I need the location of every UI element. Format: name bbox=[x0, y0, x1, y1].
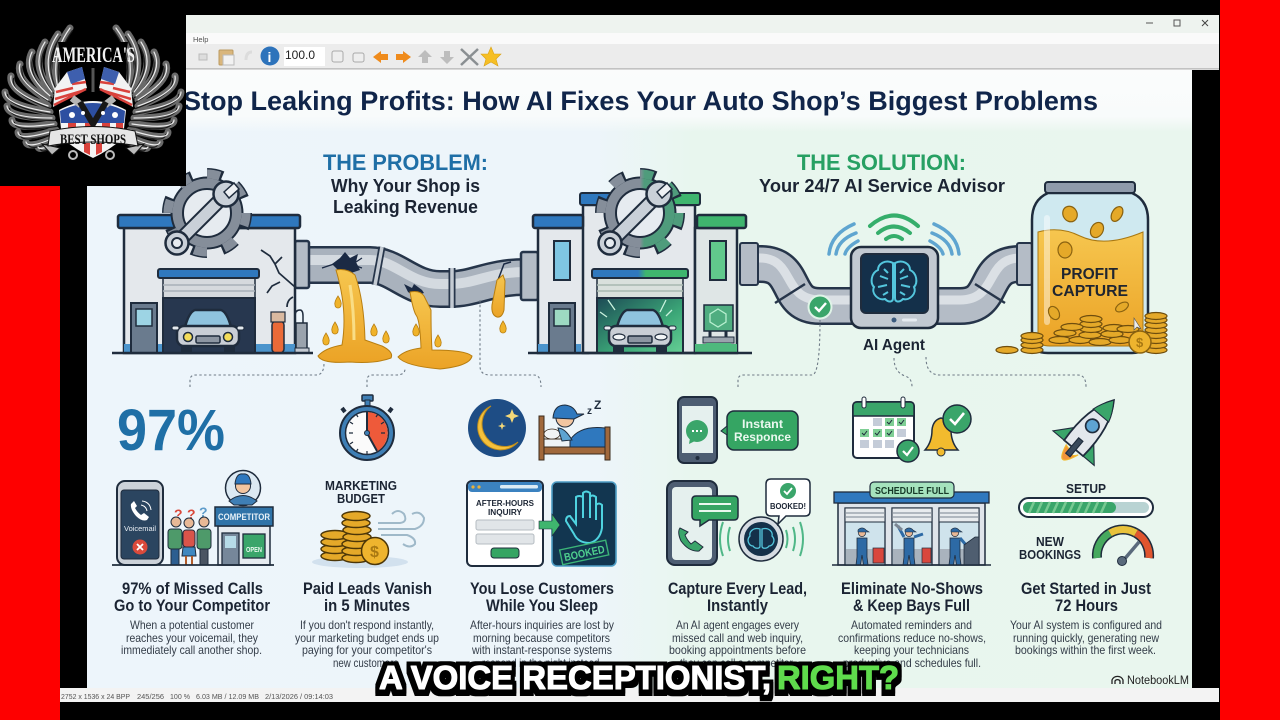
side letterbox bars bbox=[60, 70, 1219, 688]
heading: the problem: THE PROBLEM: bbox=[323, 150, 488, 175]
text: get started: Your AI system is configured and bbox=[1010, 618, 1162, 632]
icon: rocket bbox=[1043, 383, 1135, 477]
leak two bbox=[398, 284, 472, 369]
text: lose customers: respond in the night instead. bbox=[482, 656, 602, 670]
icon: phone with instant response: Instant bbox=[742, 417, 783, 431]
text: eliminate no-shows: productive and schedules full. bbox=[843, 656, 981, 670]
bays bbox=[845, 508, 979, 565]
heading: the solution bbox=[759, 150, 1005, 196]
coin stacks: $ bbox=[1136, 335, 1144, 350]
illustration: setup and new bookings bbox=[1019, 482, 1153, 566]
dotted connectors bbox=[190, 300, 1086, 387]
text: get started bbox=[1010, 580, 1162, 657]
text: PROFIT CAPTURE bbox=[1052, 266, 1128, 300]
sign: schedule full: SCHEDULE FULL bbox=[875, 485, 949, 497]
door bbox=[131, 303, 157, 353]
connected pipes bbox=[740, 243, 1035, 306]
illustration: setup and new bookings: NEW bbox=[1036, 535, 1064, 549]
gear and wrench icon bbox=[166, 174, 246, 254]
AI agent device bbox=[851, 247, 938, 328]
coin stacks: $ bbox=[370, 544, 379, 561]
heading: the problem bbox=[323, 150, 488, 217]
illustration: schedule full shop bbox=[832, 482, 991, 565]
coin stacks bbox=[996, 312, 1167, 354]
AI brain orb bbox=[720, 517, 803, 561]
icon: wireless signal bbox=[829, 216, 959, 254]
banner: best shops bbox=[42, 126, 144, 159]
text: lose customers: While You Sleep bbox=[486, 597, 598, 615]
shield bbox=[59, 98, 126, 158]
text: get started: 72 Hours bbox=[1055, 597, 1118, 615]
status bar: 2/13/2026 / 09:14:03 bbox=[265, 692, 333, 701]
sign: schedule full bbox=[870, 482, 954, 498]
status bar: 2752 x 1536 x 24 BPP bbox=[61, 692, 130, 701]
text: capture lead bbox=[668, 580, 807, 670]
text: paid leads: If you don't respond instantly, bbox=[300, 618, 434, 632]
notebooklm credit: NotebookLM bbox=[1127, 675, 1189, 687]
text: capture lead: they can call a competitor. bbox=[680, 656, 795, 670]
text: paid leads: new customers. bbox=[333, 656, 401, 670]
status bar: 6.03 MB / 12.09 MB bbox=[196, 692, 259, 701]
toolbar bbox=[186, 44, 1219, 70]
illustration: setup and new bookings: SETUP bbox=[1066, 482, 1106, 496]
server device bbox=[703, 305, 734, 353]
progress bar bbox=[1019, 498, 1153, 517]
icon: phone with instant response bbox=[678, 397, 798, 463]
text: eliminate no-shows: Automated reminders and bbox=[851, 618, 972, 632]
garage bbox=[158, 269, 259, 353]
heading: the solution: Your 24/7 AI Service Advisor bbox=[759, 176, 1005, 196]
text: missed calls: 97% of Missed Calls bbox=[122, 580, 263, 598]
icon: stopwatch bbox=[340, 395, 394, 460]
icon: calendar and bell bbox=[853, 397, 971, 462]
problem shop bbox=[112, 174, 313, 353]
coin pile bbox=[1049, 316, 1139, 346]
caption: RIGHT? bbox=[777, 659, 899, 696]
stamp: booked: BOOKED bbox=[563, 544, 606, 564]
text: paid leads: paying for your competitor's bbox=[302, 643, 432, 657]
icon: green check on pipe bbox=[808, 296, 832, 318]
logo text: America's: AMERICA'S bbox=[52, 42, 135, 67]
competitor shop: COMPETITOR bbox=[218, 512, 270, 522]
glowing garage bbox=[592, 269, 688, 353]
caption: A VOICE RECEPTIONIST, bbox=[379, 659, 771, 696]
text: capture lead: booking appointments before bbox=[669, 643, 806, 657]
text: lose customers: After-hours inquiries are lost by bbox=[470, 618, 614, 632]
icon: sleeping person in bed: z bbox=[587, 406, 592, 417]
infographic canvas bbox=[87, 70, 1192, 688]
wall cracks bbox=[261, 250, 295, 307]
illustration: voicemail and competitor bbox=[112, 470, 274, 565]
heading: the problem: Why Your Shop is bbox=[331, 176, 480, 196]
center shop half problem half solution bbox=[528, 174, 752, 353]
text: capture lead: missed call and web inquiry, bbox=[672, 631, 803, 645]
right wing bbox=[114, 28, 181, 151]
competitor shop: OPEN bbox=[246, 547, 262, 554]
label: AI Agent: AI Agent bbox=[863, 337, 926, 354]
title bar bbox=[186, 15, 1219, 44]
text: PROFIT CAPTURE: CAPTURE bbox=[1052, 283, 1128, 300]
illustration: marketing budget bbox=[312, 479, 424, 568]
phone voicemail bbox=[117, 481, 163, 565]
compressor bbox=[295, 310, 309, 353]
icon: car bbox=[172, 310, 244, 353]
icon: brain bbox=[872, 262, 916, 302]
illustration: after-hours inquiry: AFTER-HOURS bbox=[476, 498, 534, 508]
text: lose customers bbox=[470, 580, 614, 670]
text: paid leads: in 5 Minutes bbox=[324, 597, 410, 615]
icon: phone with instant response: Responce bbox=[734, 430, 791, 444]
text: eliminate no-shows: confirmations reduce no-shows, bbox=[838, 631, 986, 645]
text: lose customers: with instant-response systems bbox=[471, 643, 612, 657]
text: missed calls bbox=[114, 580, 271, 657]
extinguisher bbox=[271, 312, 285, 353]
text: get started: Get Started in Just bbox=[1021, 580, 1151, 598]
confused people: ? bbox=[187, 506, 196, 522]
leak three bbox=[492, 262, 511, 333]
gear and wrench icon bbox=[598, 174, 679, 254]
tool carts bbox=[873, 548, 931, 563]
text: eliminate no-shows: keeping your technicians bbox=[854, 643, 969, 657]
text: capture lead: Capture Every Lead, bbox=[668, 580, 807, 598]
menu label: Help bbox=[193, 35, 208, 44]
toolbar: 100.0 bbox=[285, 48, 315, 62]
windows bbox=[554, 241, 726, 280]
illustration: after-hours inquiry: INQUIRY bbox=[488, 507, 522, 517]
technicians bbox=[856, 524, 979, 565]
heading: the solution: THE SOLUTION: bbox=[797, 150, 966, 175]
status bar bbox=[60, 688, 1219, 702]
callout: booked bbox=[766, 479, 810, 524]
text: lose customers: You Lose Customers bbox=[470, 580, 614, 598]
heading: the problem: Leaking Revenue bbox=[333, 197, 478, 217]
title: Stop Leaking Profits: How AI Fixes Your Auto Shop’s Biggest Problems bbox=[183, 86, 1098, 116]
text: eliminate no-shows: Eliminate No-Shows bbox=[841, 580, 983, 598]
gauge bbox=[1097, 530, 1149, 566]
illustration: marketing budget: MARKETING bbox=[325, 479, 397, 493]
illustration: capture lead bbox=[667, 479, 810, 565]
left wing bbox=[5, 28, 72, 151]
icon: car bbox=[604, 310, 676, 353]
profit capture jar bbox=[996, 182, 1167, 354]
center backing bbox=[58, 42, 128, 100]
callout: booked: BOOKED! bbox=[770, 501, 806, 511]
door bbox=[549, 303, 575, 353]
icon: moon bbox=[468, 399, 526, 457]
icon: mouse cursor bbox=[1134, 318, 1141, 330]
text: missed calls: immediately call another shop. bbox=[121, 643, 262, 657]
floating coins bbox=[1046, 204, 1130, 322]
text: missed calls: reaches your voicemail, they bbox=[126, 631, 258, 645]
illustration: setup and new bookings: BOOKINGS bbox=[1019, 548, 1081, 562]
logo: America's Best Shops bbox=[0, 0, 186, 186]
icon: sleeping person in bed: Z bbox=[594, 398, 601, 412]
leaking pipe bbox=[295, 241, 538, 308]
leak one bbox=[318, 252, 392, 362]
text: paid leads: Paid Leads Vanish bbox=[303, 580, 432, 598]
confused people: ? bbox=[174, 506, 183, 522]
text: lose customers: morning because competitors bbox=[473, 631, 610, 645]
confused people bbox=[168, 504, 211, 565]
text: paid leads bbox=[295, 580, 439, 670]
stat: 97%: 97% bbox=[117, 398, 225, 463]
status bar: 100 % bbox=[170, 692, 190, 701]
status bar: 245/256 bbox=[137, 692, 164, 701]
text: eliminate no-shows bbox=[838, 580, 986, 670]
text: missed calls: Go to Your Competitor bbox=[114, 597, 271, 615]
text: capture lead: An AI agent engages every bbox=[676, 618, 799, 632]
competitor shop bbox=[215, 470, 273, 565]
confused people: ? bbox=[199, 504, 208, 520]
icon: sleeping person in bed bbox=[539, 398, 610, 460]
text: eliminate no-shows: & Keep Bays Full bbox=[853, 597, 970, 615]
message bubble bbox=[692, 496, 738, 526]
text: paid leads: your marketing budget ends up bbox=[295, 631, 439, 645]
text: PROFIT CAPTURE: PROFIT bbox=[1061, 266, 1118, 283]
arrow bbox=[539, 514, 560, 536]
text: capture lead: Instantly bbox=[707, 597, 769, 615]
banner: best shops: BEST SHOPS bbox=[60, 132, 126, 148]
toolbar: i bbox=[268, 49, 271, 65]
text: missed calls: When a potential customer bbox=[130, 618, 254, 632]
flags bbox=[53, 67, 133, 107]
text: get started: running quickly, generating new bbox=[1013, 631, 1159, 645]
wind lines bbox=[378, 511, 424, 546]
illustration: marketing budget: BUDGET bbox=[337, 492, 385, 506]
text: get started: bookings within the first week. bbox=[1015, 643, 1156, 657]
illustration: after-hours inquiry bbox=[467, 481, 616, 566]
phone voicemail: Voicemail bbox=[124, 524, 156, 533]
